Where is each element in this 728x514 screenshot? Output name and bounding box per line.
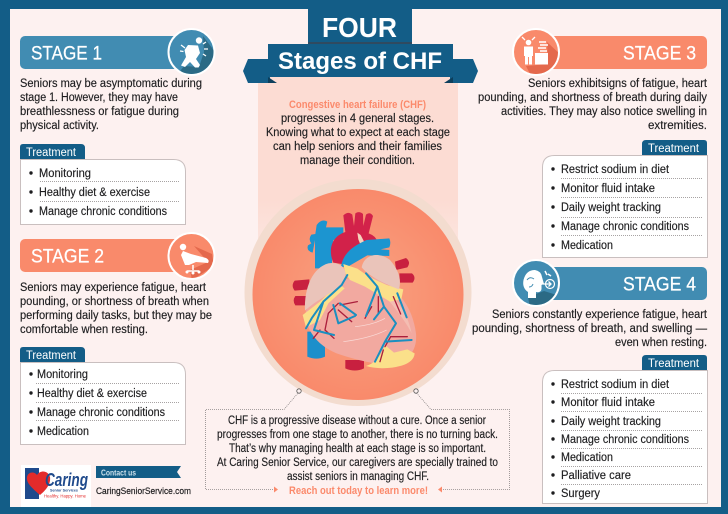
stage 4 banner <box>513 260 707 308</box>
stage 1 description: stage 1. However, they may have <box>20 92 178 104</box>
stage 3 description: Seniors exhibitsigns of fatigue, heart <box>528 78 708 90</box>
stage 4 treatment: Manage chronic conditions <box>561 434 689 446</box>
stage 4 treatment: Monitor fluid intake <box>561 397 655 409</box>
stage 4 description: even when resting. <box>615 337 707 349</box>
icon: head breathing out <box>513 260 560 308</box>
logo: Healthy. Happy. Home <box>44 494 86 498</box>
stage 2 treatment: Medication <box>37 426 89 438</box>
title: Stages of CHF <box>278 48 442 75</box>
stage 3 treatment <box>542 140 708 258</box>
stage 2 description: Seniors may experience fatigue, heart <box>20 282 207 294</box>
callout: prognosis: progresses from one stage to another, there is no turning back. <box>217 429 498 441</box>
callout: prognosis: At Caring Senior Service, our caregivers are specially trained to <box>217 457 498 469</box>
stage 3 treatment: Restrict sodium in diet <box>561 164 670 176</box>
stage 1 description <box>20 78 202 132</box>
callout: prognosis: assist seniors in managing CHF. <box>287 471 429 483</box>
stage 1 banner: STAGE 1 <box>31 42 102 64</box>
stage 3 description: extremities. <box>648 120 707 132</box>
stage 1 treatment: Treatment <box>26 147 77 159</box>
stage 4 treatment: Palliative care <box>561 470 631 482</box>
stage 2 description: pounding, or shortness of breath when <box>20 296 209 308</box>
logo <box>21 465 91 507</box>
stage 3 treatment: Treatment <box>648 143 700 155</box>
stage 3 banner <box>513 29 707 76</box>
intro text: progresses in 4 general stages. <box>281 113 434 125</box>
stage 3 treatment: Manage chronic conditions <box>561 221 689 233</box>
stage 2 description <box>20 282 212 336</box>
contact ribbon <box>96 466 181 478</box>
stage 1 description: breathlessness or fatigue during <box>20 106 179 118</box>
stage 1 description: Seniors may be asymptomatic during <box>20 78 202 90</box>
stage 3 description <box>478 78 708 132</box>
callout: prognosis: That’s why managing health at each stage is so important. <box>229 443 486 455</box>
title: FOUR <box>322 12 397 43</box>
stage 3 banner: STAGE 3 <box>623 42 696 64</box>
stage 4 treatment <box>542 355 708 504</box>
icon: stressed person at desk <box>513 29 562 76</box>
stage 4 banner: STAGE 4 <box>623 274 696 296</box>
stage 4 treatment: Treatment <box>648 358 700 370</box>
stage 4 treatment: Medication <box>561 452 613 464</box>
intro text: manage their condition. <box>300 155 415 167</box>
stage 2 banner <box>20 233 214 280</box>
stage 2 description: performing daily tasks, but they may be <box>20 310 212 322</box>
callout: prognosis: Reach out today to learn more! <box>289 485 428 497</box>
stage 4 description: pounding, shortness of breath, and swelling — <box>472 323 707 335</box>
icon: person in pain <box>168 29 218 78</box>
stage 2 treatment: Treatment <box>26 350 77 362</box>
intro text <box>266 99 450 167</box>
website: CaringSeniorService.com <box>96 486 191 497</box>
stage 2 treatment: Manage chronic conditions <box>37 407 165 419</box>
intro text: can help seniors and their families <box>273 141 442 153</box>
logo: Senior Services <box>50 488 79 492</box>
heart circle <box>244 179 472 406</box>
stage 4 treatment: Restrict sodium in diet <box>561 379 670 391</box>
panel: intro background <box>258 75 458 310</box>
stage 2 treatment: Monitoring <box>37 369 88 381</box>
stage 2 treatment: Healthy diet & exercise <box>37 388 147 400</box>
stage 3 treatment: Monitor fluid intake <box>561 183 655 195</box>
title <box>243 9 478 83</box>
icon: person reclining in chair <box>168 233 214 280</box>
stage 1 treatment: Healthy diet & exercise <box>39 187 150 199</box>
stage 4 treatment: Daily weight tracking <box>561 416 661 428</box>
stage 4 treatment: Surgery <box>561 488 600 500</box>
stage 2 treatment <box>20 347 186 444</box>
stage 1 description: physical activity. <box>20 120 99 132</box>
stage 3 description: pounding, and shortness of breath during daily <box>478 92 707 104</box>
stage 1 treatment: Monitoring <box>39 168 91 180</box>
stage 4 description: Seniors constantly experience fatigue, heart <box>492 309 708 321</box>
stage 1 treatment: Manage chronic conditions <box>39 206 167 218</box>
callout: prognosis: CHF is a progressive disease without a cure. Once a senior <box>228 415 486 427</box>
illustration: heart <box>293 212 416 370</box>
stage 3 description: activities. They may also notice swelling in <box>501 106 707 118</box>
stage 4 description <box>472 309 708 349</box>
stage 3 treatment: Medication <box>561 240 613 252</box>
intro text: Knowing what to expect at each stage <box>266 127 450 139</box>
stage 3 treatment: Daily weight tracking <box>561 202 661 214</box>
stage 2 banner: STAGE 2 <box>31 246 104 268</box>
contact ribbon: Contact us <box>101 468 136 478</box>
stage 1 treatment <box>20 144 186 224</box>
stage 1 banner <box>20 29 218 78</box>
logo: Caring <box>45 470 88 490</box>
stage 2 description: comfortable when resting. <box>20 324 148 336</box>
intro text: Congestive heart failure (CHF) <box>289 99 426 111</box>
callout: prognosis <box>206 389 510 497</box>
